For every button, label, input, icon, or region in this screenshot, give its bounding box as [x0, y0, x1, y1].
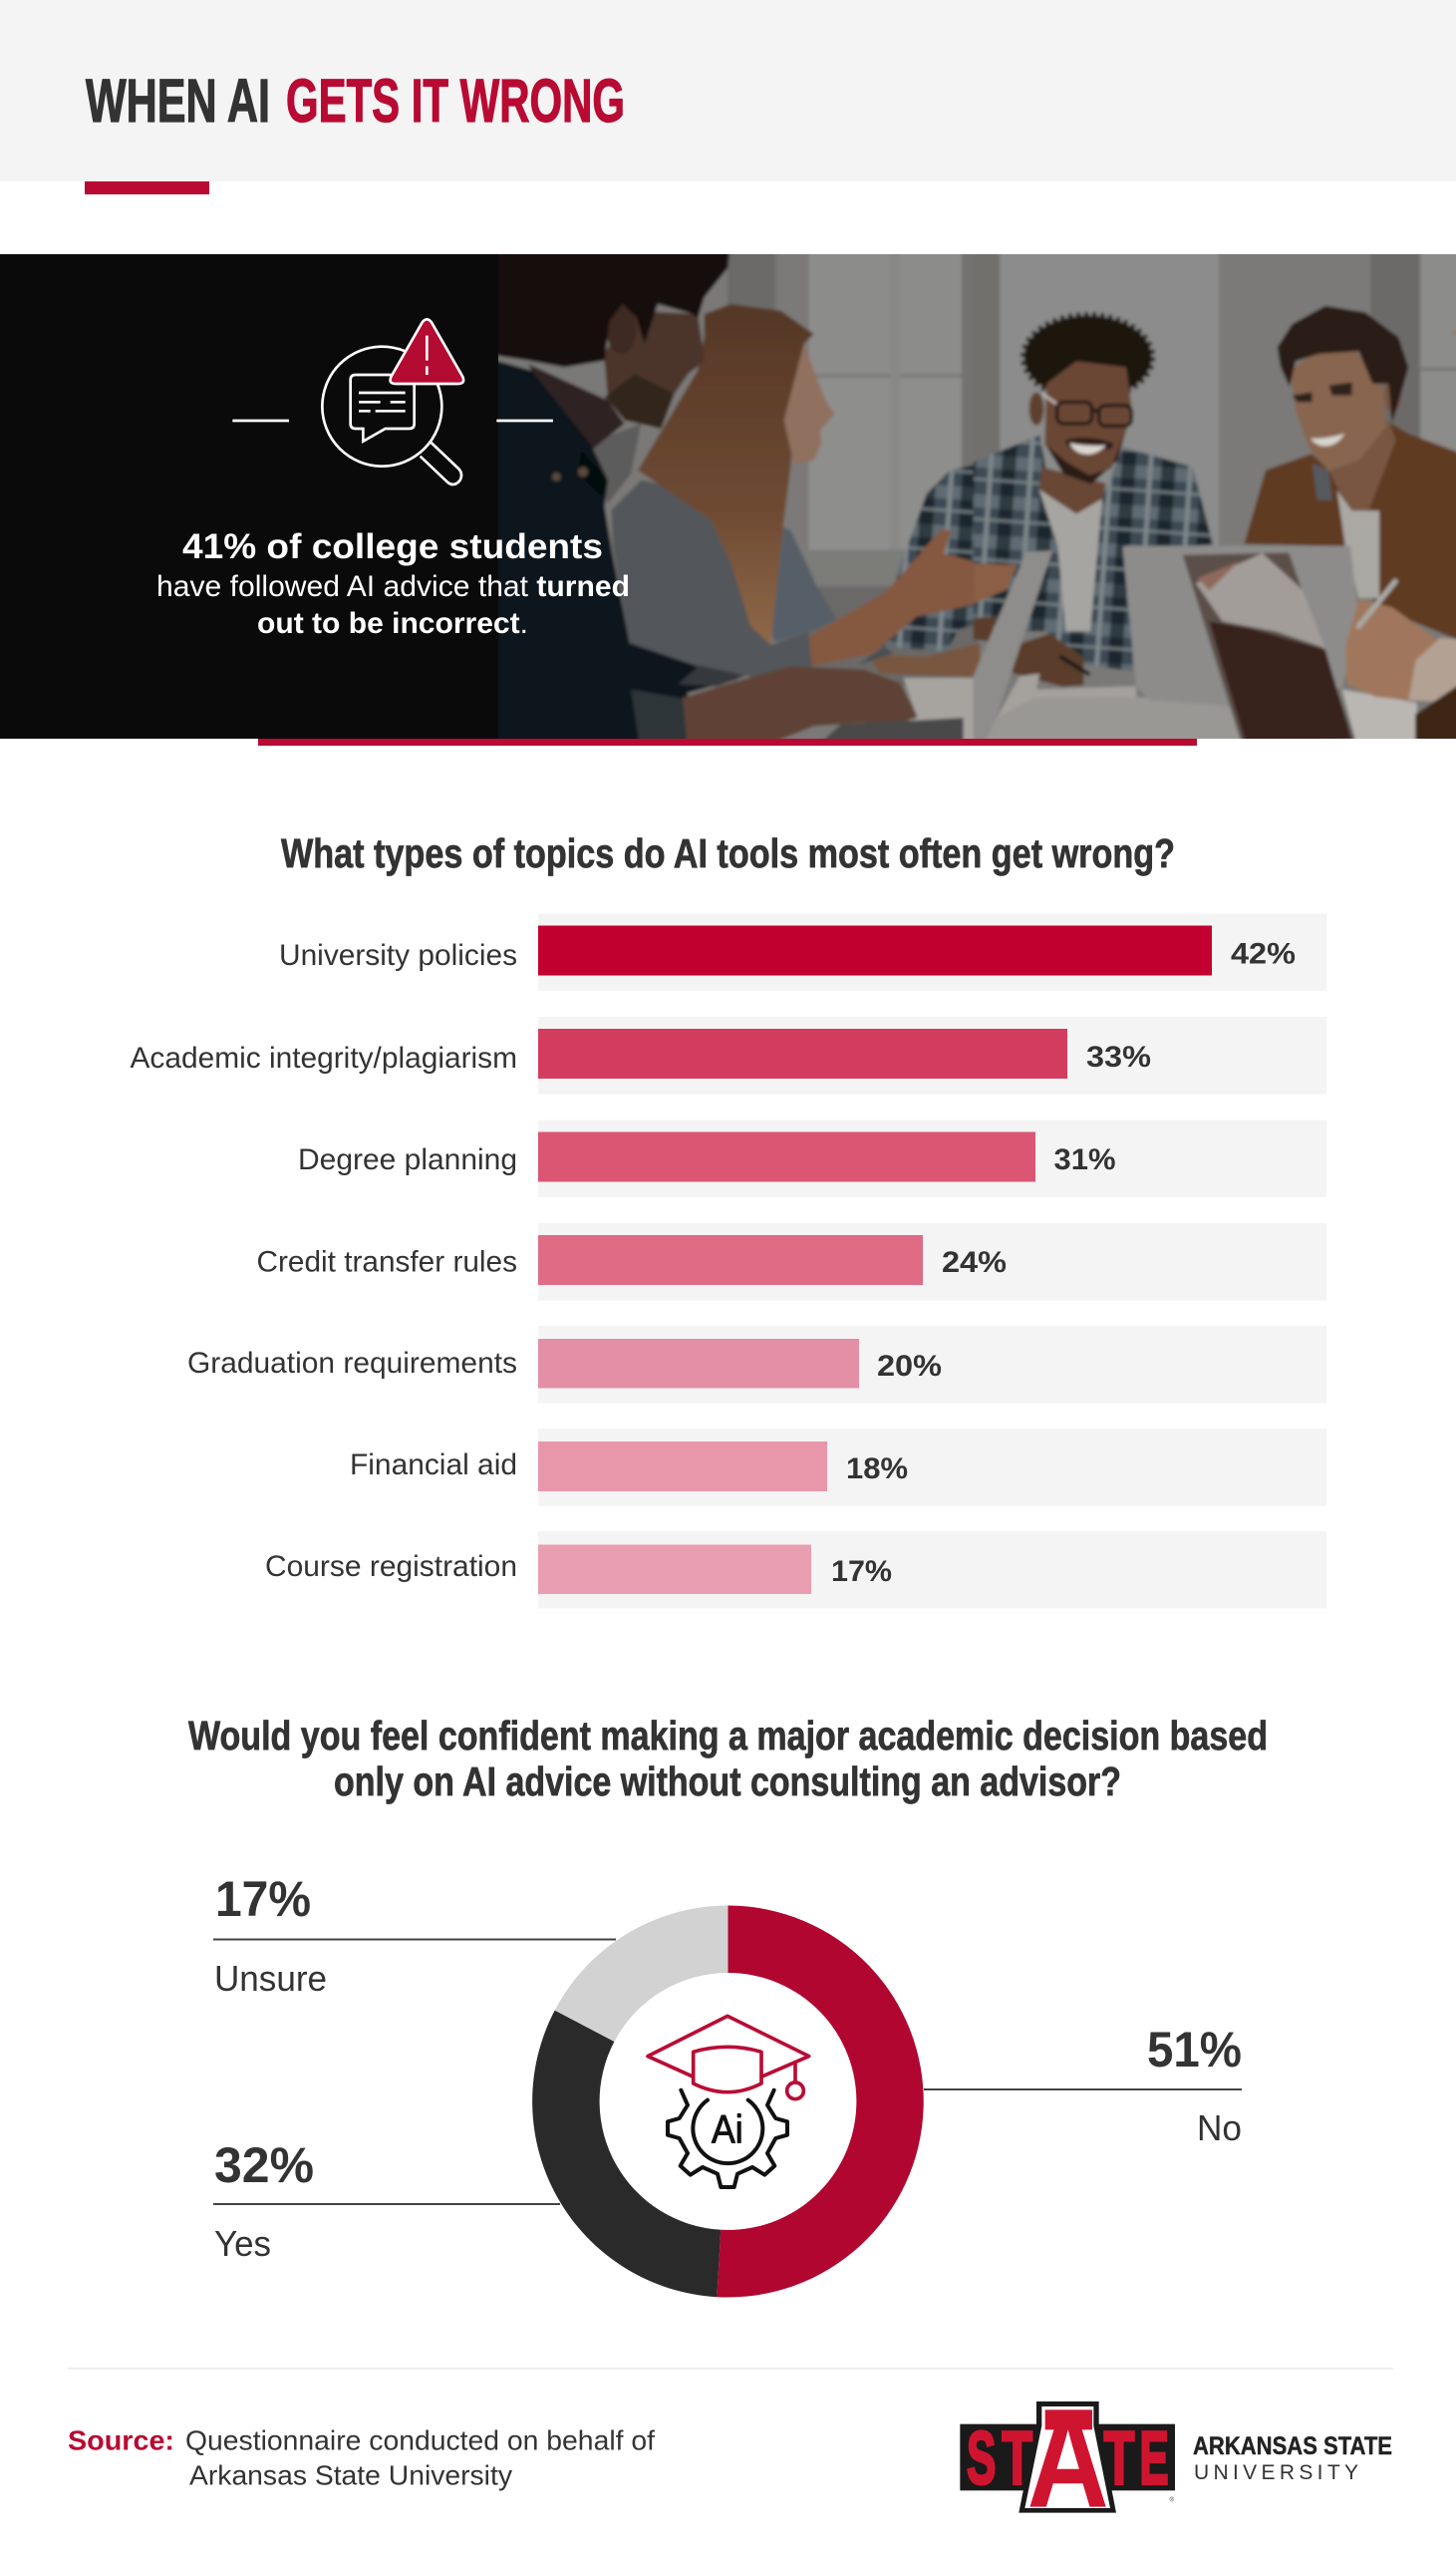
logo mark: STATE block letters: T: [1104, 2416, 1134, 2500]
right man face: [1291, 351, 1386, 471]
logo mark: STATE block letters: [960, 2388, 1175, 2536]
man left neck and body: [528, 364, 625, 451]
source note: Questionnaire conducted on behalf of: [185, 2424, 655, 2456]
woman face: [784, 344, 834, 465]
man left hair: [498, 254, 731, 369]
bar: Graduation requirements 20%: [187, 1326, 1326, 1404]
wall gap: [588, 424, 641, 503]
woman arm: [809, 530, 980, 666]
heading: confidence question: only on AI advice without consulting an advisor?: [334, 1758, 1121, 1804]
callout: Unsure 17%: Unsure: [214, 1958, 327, 1999]
bar: Course registration 17%: [265, 1531, 1326, 1609]
bar: University policies 42%: University policies: [279, 939, 517, 972]
logo mark: STATE block letters: A: [1027, 2388, 1109, 2536]
center man neck: [1039, 467, 1106, 514]
bar: Course registration 17%: 17%: [831, 1555, 892, 1588]
segment: No 51%: [717, 1906, 924, 2297]
bar: Financial aid 18%: [350, 1429, 1326, 1505]
callout: Unsure 17%: [213, 1871, 616, 1999]
title: GETS IT WRONG: [286, 67, 625, 135]
source note: Source:: [68, 2424, 174, 2456]
callout: No 51%: [924, 2022, 1242, 2148]
statistic text: [156, 526, 630, 640]
bar: Graduation requirements 20%: Graduation requirements: [187, 1347, 517, 1380]
icon: magnifying glass with warning triangle: [232, 319, 553, 484]
logo mark: STATE block letters: ®: [1169, 2496, 1174, 2503]
bar: Financial aid 18%: Financial aid: [350, 1448, 517, 1481]
bar: Degree planning 31%: [298, 1120, 1326, 1197]
bar: Credit transfer rules 24%: 24%: [942, 1246, 1007, 1279]
window backdrop right: [980, 254, 999, 458]
plaid sleeve behind hand: [880, 464, 980, 651]
center man hair: [1024, 316, 1152, 399]
center man tee: [1039, 489, 1102, 631]
logo wordmark: ARKANSAS STATE: [1193, 2432, 1392, 2460]
bar: Graduation requirements 20%: 20%: [877, 1350, 942, 1383]
photo of students at a table: [498, 254, 1456, 739]
logo: Arkansas State University: UNIVERSITY: [1194, 2461, 1358, 2484]
right man hair: [1278, 306, 1408, 424]
bar: Course registration 17%: Course registration: [265, 1550, 517, 1583]
bar: Academic integrity/plagiarism 33%: Academic integrity/plagiarism: [130, 1042, 517, 1075]
bar: Credit transfer rules 24%: Credit transfer rules: [257, 1246, 517, 1278]
icon: graduation cap on AI gear: Ai: [712, 2107, 743, 2151]
title: WHEN AI: [86, 67, 270, 135]
callout: Yes 32%: 32%: [214, 2137, 314, 2193]
bar: Academic integrity/plagiarism 33%: [130, 1017, 1326, 1095]
footer divider: [68, 2368, 1393, 2370]
callout: No 51%: 51%: [1147, 2022, 1242, 2077]
right man neck and tee: [1328, 421, 1396, 510]
logo mark: STATE block letters: T: [1002, 2416, 1032, 2500]
statistic text: 41% of college students: [182, 526, 603, 566]
laptops: [974, 551, 1052, 746]
bar: Degree planning 31%: 31%: [1054, 1143, 1116, 1176]
title: [86, 67, 625, 135]
bar: University policies 42%: [279, 913, 1326, 991]
source note: Arkansas State University: [189, 2460, 512, 2490]
woman hair: [638, 304, 814, 645]
callout: No 51%: No: [1197, 2107, 1242, 2148]
heading: topics question: What types of topics do AI tools most often get wrong?: [281, 830, 1175, 876]
donut chart: confidence: [532, 1906, 924, 2297]
man left face: [604, 311, 705, 429]
center man face: [1044, 361, 1132, 484]
right table and hands: [1342, 690, 1417, 746]
bar: Degree planning 31%: Degree planning: [298, 1143, 517, 1176]
red strip under photo: [258, 739, 1197, 746]
callout: Unsure 17%: 17%: [215, 1871, 311, 1927]
segment: Unsure 17%: [555, 1906, 728, 2042]
bar chart: topics AI gets wrong: [130, 913, 1326, 1609]
heading: confidence question: Would you feel confident making a major academic decision based: [188, 1713, 1268, 1758]
statistic text: have followed AI advice that turned: [156, 570, 630, 603]
logo mark: STATE block letters: S: [967, 2416, 996, 2500]
bar: Academic integrity/plagiarism 33%: 33%: [1086, 1041, 1151, 1074]
woman cardigan: [611, 480, 812, 681]
center man shirt: [974, 436, 1213, 671]
bar: Credit transfer rules 24%: [257, 1223, 1326, 1300]
bar: Financial aid 18%: 18%: [846, 1452, 908, 1485]
source note: [68, 2424, 655, 2490]
heading: confidence question: [188, 1713, 1268, 1804]
table: [903, 676, 975, 739]
header band: [0, 0, 1456, 194]
callout: Yes 32%: [213, 2137, 560, 2264]
center man hands and pen: [1010, 634, 1083, 687]
icon: graduation cap on AI gear: [648, 2016, 809, 2187]
panel: hero photo with statistic: [0, 254, 1456, 739]
logo: Arkansas State University: [960, 2388, 1392, 2536]
callout: Yes 32%: Yes: [214, 2223, 271, 2264]
bar: University policies 42%: 42%: [1231, 937, 1296, 971]
woman denim: [771, 526, 836, 642]
window backdrop left: [724, 254, 775, 311]
logo mark: STATE block letters: E: [1139, 2416, 1169, 2500]
segment: Yes 32%: [532, 2011, 721, 2297]
statistic text: out to be incorrect.: [257, 607, 528, 640]
right man jacket: [1244, 424, 1456, 641]
man left hand: [683, 666, 918, 746]
